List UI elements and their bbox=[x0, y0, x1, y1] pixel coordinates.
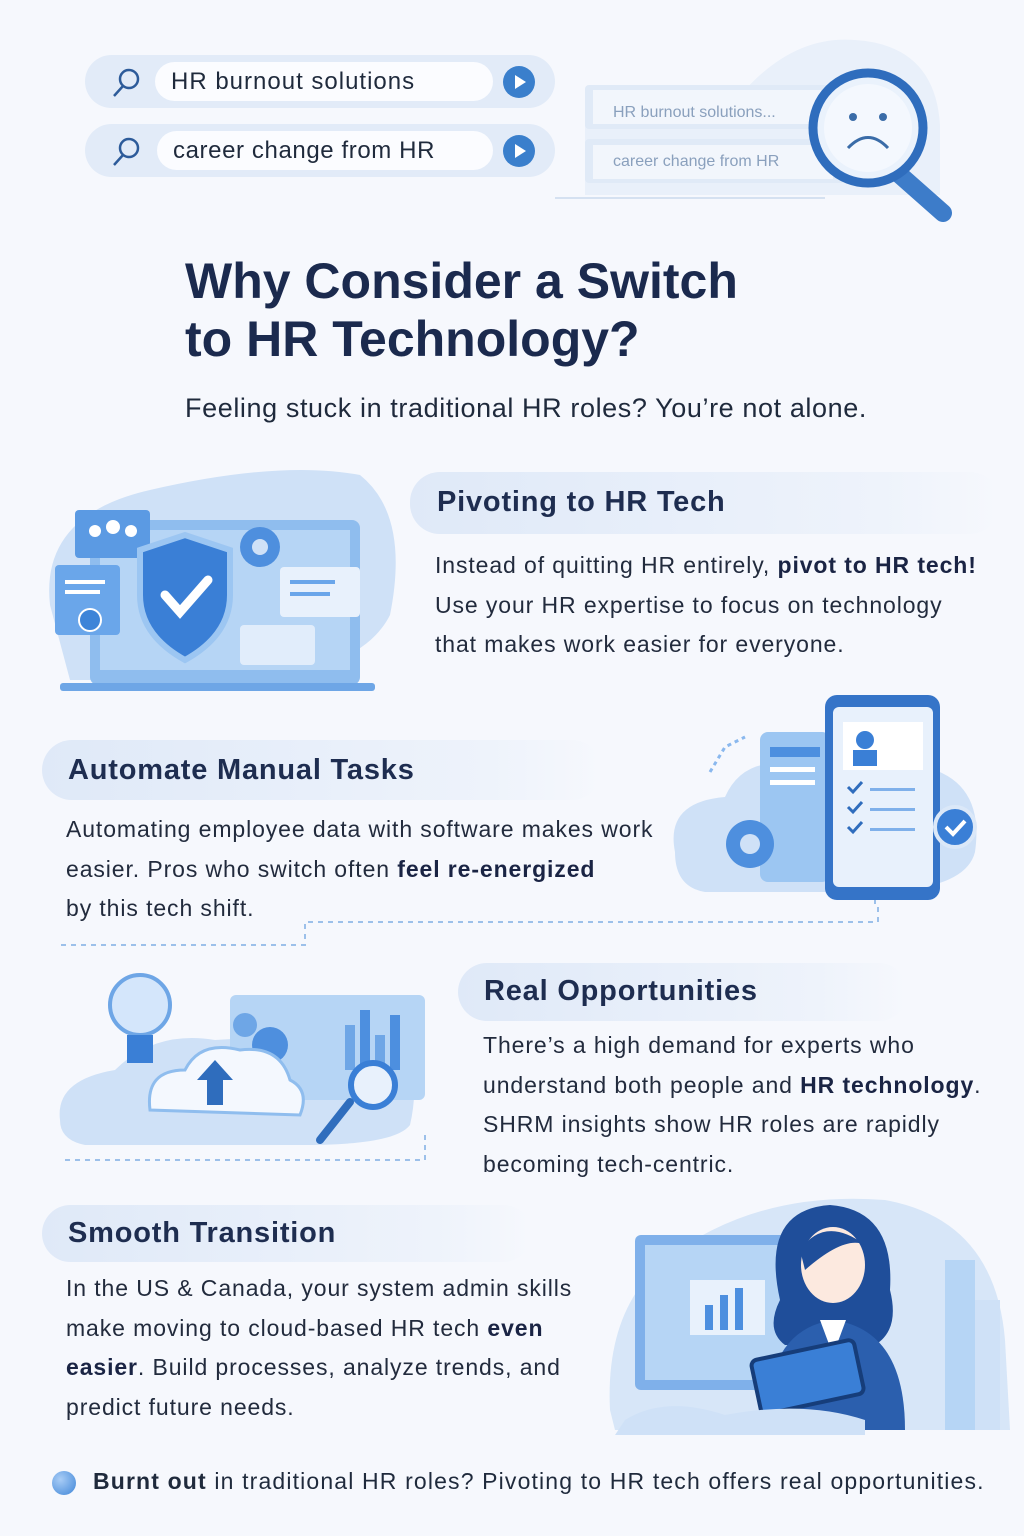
search bar 2: career change from HR bbox=[173, 137, 435, 164]
section: Real Opportunities bbox=[458, 963, 981, 1177]
body text: that makes work easier for everyone. bbox=[435, 631, 845, 657]
magnifier illustration bbox=[555, 40, 952, 222]
body text: make moving to cloud-based HR tech even bbox=[66, 1314, 543, 1340]
section: Pivoting to HR Tech: Pivoting to HR Tech bbox=[437, 486, 726, 518]
search bar 2 bbox=[85, 124, 555, 177]
body text: SHRM insights show HR roles are rapidly bbox=[483, 1111, 940, 1137]
footer text: Burnt out in traditional HR roles? Pivoting to HR tech offers real opportunities. bbox=[93, 1468, 985, 1494]
magnifier illustration: career change from HR bbox=[613, 153, 779, 170]
subtitle: Feeling stuck in traditional HR roles? You’re not alone. bbox=[185, 393, 867, 423]
body text: becoming tech-centric. bbox=[483, 1150, 734, 1176]
footer bbox=[52, 1468, 985, 1495]
heading pill bbox=[410, 472, 1000, 534]
body text bbox=[483, 1032, 981, 1177]
dashed connector bbox=[61, 907, 879, 946]
illustration: phone checklist bbox=[674, 695, 977, 904]
illustration: security shield dashboard bbox=[49, 470, 396, 691]
section: Real Opportunities: Real Opportunities bbox=[484, 975, 758, 1007]
section: Smooth Transition: Smooth Transition bbox=[68, 1217, 336, 1249]
heading pill bbox=[42, 1205, 532, 1262]
search bar 1: HR burnout solutions bbox=[171, 68, 415, 95]
section: Pivoting to HR Tech bbox=[410, 472, 977, 657]
body text bbox=[66, 1275, 572, 1420]
body text: by this tech shift. bbox=[66, 895, 254, 921]
search bar 1 bbox=[85, 55, 555, 108]
body text: There’s a high demand for experts who bbox=[483, 1032, 915, 1058]
illustration: woman with tablet bbox=[610, 1198, 1010, 1435]
body text bbox=[435, 552, 977, 657]
heading pill bbox=[458, 963, 908, 1021]
body text bbox=[66, 816, 653, 921]
body text: easier. Pros who switch often feel re-energized bbox=[66, 856, 595, 882]
heading pill bbox=[42, 740, 602, 800]
body text: Use your HR expertise to focus on technology bbox=[435, 592, 943, 618]
title: to HR Technology? bbox=[185, 311, 640, 367]
section: Smooth Transition bbox=[42, 1205, 572, 1420]
section: Automate Manual Tasks: Automate Manual Tasks bbox=[68, 754, 415, 786]
title: Why Consider a Switch bbox=[185, 253, 738, 309]
body text: understand both people and HR technology. bbox=[483, 1072, 981, 1098]
body text: easier. Build processes, analyze trends, and bbox=[66, 1354, 561, 1380]
body text: In the US & Canada, your system admin skills bbox=[66, 1275, 572, 1301]
magnifier illustration: HR burnout solutions... bbox=[613, 104, 776, 121]
body text: predict future needs. bbox=[66, 1394, 295, 1420]
body text: Automating employee data with software makes work bbox=[66, 816, 653, 842]
section: Automate Manual Tasks bbox=[42, 740, 653, 921]
body text: Instead of quitting HR entirely, pivot to HR tech! bbox=[435, 552, 977, 578]
illustration: cloud lightbulb bbox=[60, 973, 426, 1161]
title bbox=[185, 253, 738, 367]
icon: dot bbox=[52, 1471, 76, 1495]
